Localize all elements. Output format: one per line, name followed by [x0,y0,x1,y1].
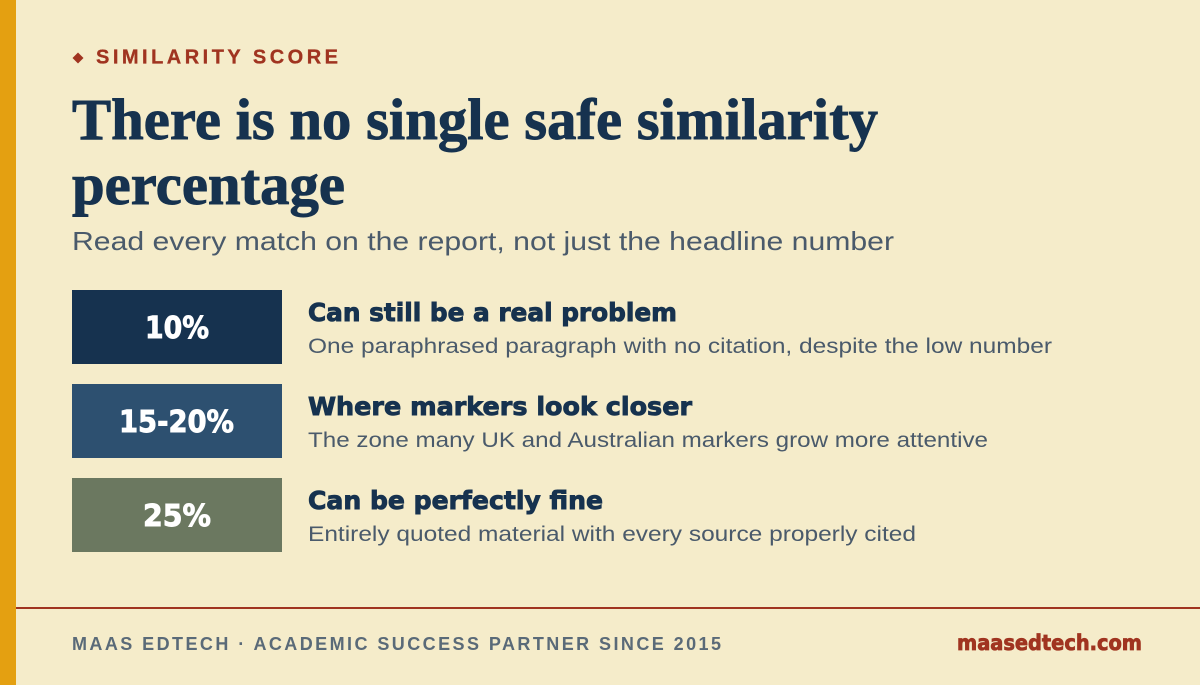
title [72,87,878,217]
eyebrow label [72,46,338,68]
badge: 10%: 10% [145,311,209,346]
title: There is no single safe similarity [72,87,878,152]
heading: real problem: Can still be a real problem [308,298,677,327]
title: percentage [72,152,345,217]
heading: markers look closer: Where markers look closer [308,392,693,421]
subtitle: Read every match on the report, not just the headline number [72,226,894,256]
panel: 10% row [72,290,1052,364]
description: perfectly fine: Entirely quoted material with every source properly cited [308,523,916,546]
badge: 15-20%: 15-20% [119,405,234,440]
description: markers look closer: The zone many UK and Australian markers grow more attentive [308,429,988,452]
badge: 10% [72,290,282,364]
footer website: maasedtech.com [957,631,1142,655]
eyebrow text: SIMILARITY SCORE [96,46,338,68]
accent stripe [0,0,16,685]
heading: perfectly fine: Can be perfectly fine [308,486,603,515]
panel: 15-20% row [72,384,988,458]
footer tagline: MAAS EDTECH · ACADEMIC SUCCESS PARTNER SINCE 2015 [72,634,721,654]
icon: diamond [72,52,84,64]
badge: 15-20% [72,384,282,458]
badge: 25% [72,478,282,552]
badge: 25%: 25% [143,499,211,534]
panel: 25% row [72,478,916,552]
description: real problem: One paraphrased paragraph with no citation, despite the low number [308,335,1052,358]
